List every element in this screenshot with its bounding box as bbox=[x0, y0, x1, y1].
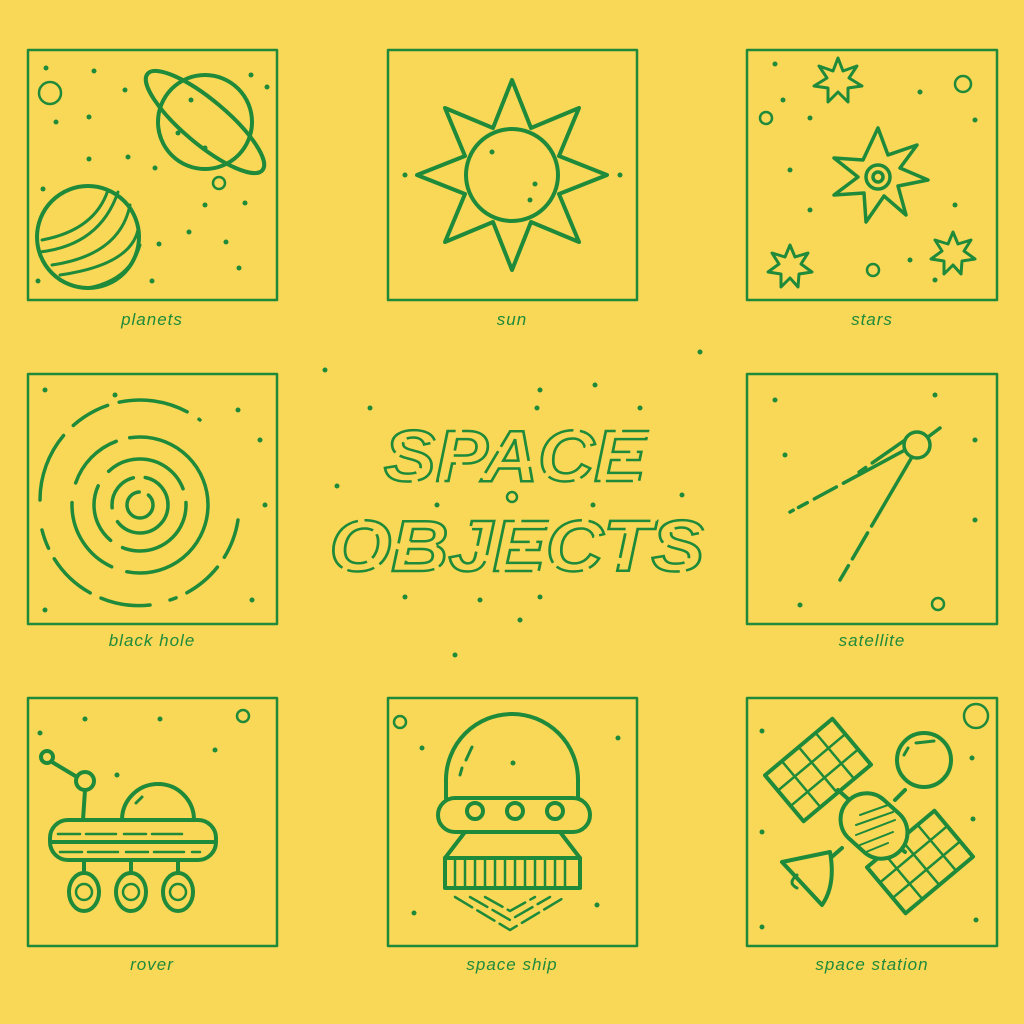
labels: black hole bbox=[109, 631, 195, 650]
panel: rover bbox=[28, 698, 277, 946]
labels: satellite bbox=[839, 631, 905, 650]
labels: sun bbox=[497, 310, 527, 329]
icon: big star bbox=[834, 128, 928, 222]
icon: striped planet bbox=[37, 186, 140, 288]
labels: space station bbox=[815, 955, 929, 974]
title bbox=[330, 417, 704, 587]
title: OBJECTS bbox=[330, 507, 704, 587]
panel: satellite bbox=[747, 374, 997, 624]
panel: space ship bbox=[388, 698, 637, 946]
icon: space ship bbox=[438, 714, 590, 930]
icon: satellite bbox=[790, 428, 940, 580]
icon: ringed planet bbox=[133, 57, 277, 187]
panel: space station bbox=[747, 698, 997, 946]
icon: black hole bbox=[40, 400, 238, 606]
panel: black hole bbox=[28, 374, 277, 624]
icon: sun bbox=[417, 80, 607, 270]
panel: sun bbox=[388, 50, 637, 300]
labels: stars bbox=[851, 310, 893, 329]
icon: space station bbox=[765, 719, 973, 913]
panel: stars bbox=[747, 50, 997, 300]
panel: planets bbox=[28, 50, 277, 300]
center dots bbox=[322, 350, 702, 658]
title: SPACE bbox=[384, 417, 648, 497]
labels bbox=[109, 310, 929, 974]
labels: rover bbox=[130, 955, 174, 974]
labels: space ship bbox=[466, 955, 558, 974]
labels: planets bbox=[120, 310, 183, 329]
icon: rover bbox=[41, 751, 216, 911]
